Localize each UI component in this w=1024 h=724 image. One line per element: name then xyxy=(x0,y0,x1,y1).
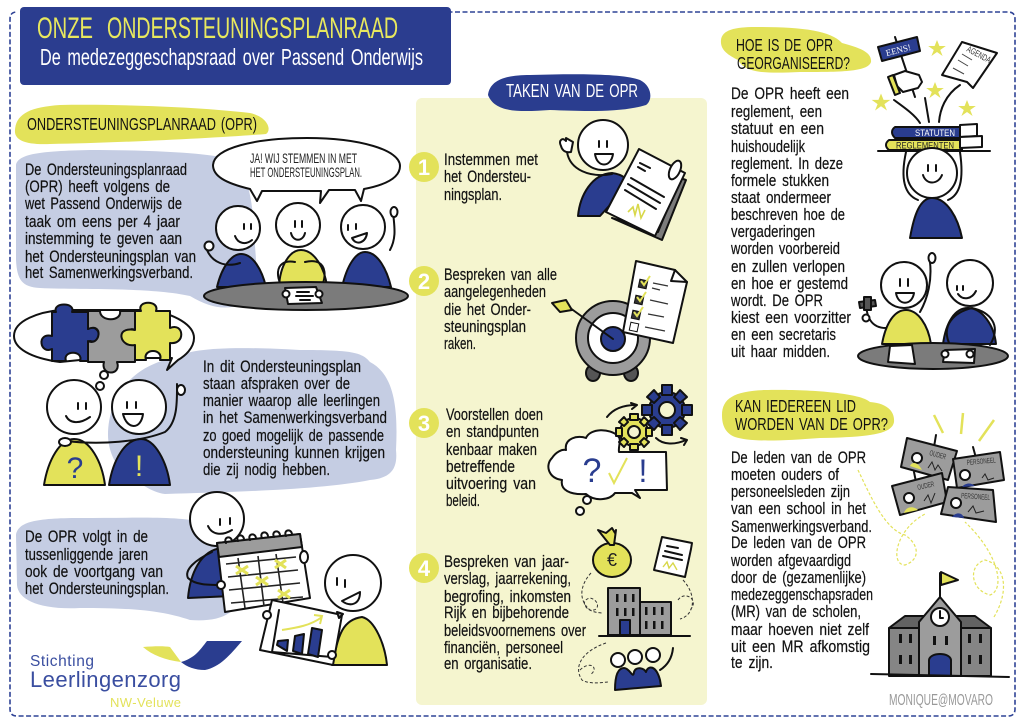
text: lidmaatschap: moeten ouders of xyxy=(731,466,839,484)
thought bubble: puzzle xyxy=(14,303,194,390)
title xyxy=(37,12,398,45)
item 4: 4 xyxy=(418,556,431,581)
item 1: 1 xyxy=(418,155,430,180)
title banner xyxy=(20,7,451,85)
illustration: name badges xyxy=(858,413,1004,617)
text: lidmaatschap: te zijn. xyxy=(731,654,773,672)
subtitle: De medezeggeschapsraad over Passend Onderwijs xyxy=(40,44,423,70)
panel: taken van de OPR xyxy=(409,74,707,705)
illustration: chair and secretary at table xyxy=(858,253,1008,369)
text: lidmaatschap: uit een MR afkomstig xyxy=(731,638,870,656)
heading: kan iedereen lid worden: KAN IEDEREEN LID xyxy=(735,396,856,416)
item 2: steuningsplan xyxy=(444,318,526,336)
item 3: 3 xyxy=(418,411,430,436)
heading: kan iedereen lid worden xyxy=(722,390,894,440)
text: georganiseerd: staat ondermeer xyxy=(731,189,831,207)
item 2: raken. xyxy=(444,335,476,353)
item 3: betreffende xyxy=(446,458,515,476)
text: lidmaatschap: De leden van de OPR xyxy=(731,534,866,552)
logo: Stichting Leerlingenzorg: NW-Veluwe xyxy=(110,695,181,710)
heading: taken: TAKEN VAN DE OPR xyxy=(506,81,638,101)
illustration: money bag, document, building, people xyxy=(579,528,693,690)
item 4: begrofing, inkomsten xyxy=(444,588,571,606)
text: lidmaatschap: worden afgevaardigd xyxy=(730,552,851,570)
illustration: sign, agenda, books and person xyxy=(872,37,997,238)
illustration: person with bar chart xyxy=(260,555,387,665)
illustration: sign, agenda, books and person: STATUTEN xyxy=(915,128,955,139)
text: lidmaatschap: door de (gezamenlijke) xyxy=(731,569,866,587)
logo: Stichting Leerlingenzorg: Leerlingenzorg xyxy=(30,667,181,692)
panel: afspraken text block: in het Samenwerkingsverband xyxy=(203,409,387,427)
illustration: name badges: PERSONEEL xyxy=(961,491,990,502)
text: lidmaatschap: van een school in het xyxy=(731,500,866,518)
text: georganiseerd: beschreven hoe de xyxy=(731,206,845,224)
illustration: name badges: OUDER xyxy=(928,448,948,461)
text: lidmaatschap: medezeggenschapsraden xyxy=(731,586,873,604)
title: ONZE xyxy=(37,12,93,45)
puzzle piece: blue xyxy=(41,304,99,361)
heading: hoe is de OPR georganiseerd xyxy=(721,27,871,73)
item 1: het Ondersteu- xyxy=(444,168,531,186)
item 3: beleid. xyxy=(446,492,480,510)
item 2: Bespreken van alle xyxy=(444,266,557,284)
item 3: Voorstellen doen xyxy=(446,406,543,424)
text: georganiseerd: uit haar midden. xyxy=(731,343,830,361)
panel: intro text block: wet Passend Onderwijs de xyxy=(24,195,182,213)
panel: intro text block xyxy=(16,150,256,308)
text: lidmaatschap: Samenwerkingsverband. xyxy=(731,518,872,536)
text: georganiseerd: reglement. In deze xyxy=(731,155,843,173)
panel: voortgang text block: De OPR volgt in de xyxy=(25,528,148,546)
heading: kan iedereen lid worden: WORDEN VAN DE OPR? xyxy=(735,414,888,434)
title: ONDERSTEUNINGSPLANRAAD xyxy=(107,12,398,45)
item 2: die het Onder- xyxy=(444,301,531,319)
panel: afspraken text block: zo goed mogelijk de passende xyxy=(203,427,384,445)
text: georganiseerd: en hoe er gestemd xyxy=(731,275,848,293)
panel: afspraken text block: In dit Ondersteuningsplan xyxy=(203,358,361,376)
panel: ondersteuningsplanraad heading xyxy=(15,105,269,144)
calendar xyxy=(217,534,310,612)
item 1 xyxy=(409,151,538,204)
illustration: cloud with gears: ? xyxy=(583,452,601,490)
illustration: sign, agenda, books and person: AGENDA xyxy=(965,44,993,65)
text: georganiseerd: huishoudelijk xyxy=(731,138,806,156)
panel: intro text block: De Ondersteuningsplanraad xyxy=(25,161,187,179)
item 3: kenbaar maken xyxy=(446,441,537,459)
item 2: 2 xyxy=(418,269,430,294)
panel: intro text block: instemming te geven aan xyxy=(25,230,182,248)
text: georganiseerd: en een secretaris xyxy=(731,326,836,344)
panel: afspraken text block xyxy=(108,348,397,494)
text: georganiseerd: vergaderingen xyxy=(731,223,815,241)
item 2 xyxy=(409,266,557,353)
item 4: Rijk en bijbehorende xyxy=(444,604,569,622)
text: lidmaatschap xyxy=(730,449,873,672)
illustration: three people at table xyxy=(204,203,408,310)
item 2: aangelegenheden xyxy=(444,283,546,301)
item 3 xyxy=(409,406,543,510)
text: georganiseerd: reglement, een xyxy=(731,103,822,121)
panel: voortgang text block: het Ondersteuningsplan. xyxy=(25,580,169,598)
illustration: name badges: OUDER xyxy=(916,479,935,492)
panel: afspraken text block: ondersteuning kunnen krijgen xyxy=(203,444,385,462)
text: lidmaatschap: personeelsleden zijn xyxy=(731,483,850,501)
illustration: two people with question and exclamation xyxy=(44,380,185,485)
illustration: cloud with gears: ! xyxy=(639,453,647,489)
panel: intro text block: het Ondersteuningsplan van xyxy=(25,248,196,266)
illustration: two people with question and exclamation: ? xyxy=(67,452,83,485)
illustration: sign, agenda, books and person: EENS! xyxy=(885,42,912,58)
illustration: name badges: PERSONEEL xyxy=(966,455,996,467)
illustration: sign, agenda, books and person: REGLEMENTEN xyxy=(896,140,954,150)
panel: afspraken text block: staan afspraken over de xyxy=(203,375,350,393)
item 1: Instemmen met xyxy=(444,151,538,169)
text: georganiseerd: formele stukken xyxy=(731,172,829,190)
speech bubble: JA! WIJ STEMMEN IN MET xyxy=(250,150,357,166)
logo: Stichting Leerlingenzorg: Stichting xyxy=(30,653,94,670)
illustration: person with document xyxy=(560,120,686,240)
panel: afspraken text block: manier waarop alle leerlingen xyxy=(203,392,380,410)
illustration: school xyxy=(871,572,1009,677)
illustration: person with calendar xyxy=(187,492,310,612)
text: georganiseerd: statuut en een xyxy=(731,120,824,138)
gear: yellow xyxy=(616,414,652,450)
illustration: two people with question and exclamation: ! xyxy=(135,450,143,483)
heading: hoe is de OPR georganiseerd: GEORGANISEERD? xyxy=(737,53,850,73)
item 4: beleidsvoornemens over xyxy=(444,622,586,640)
text: georganiseerd: De OPR heeft een xyxy=(731,85,849,103)
item 1: ningsplan. xyxy=(444,186,502,204)
heading: hoe is de OPR georganiseerd: HOE IS DE OPR xyxy=(736,35,833,55)
item 4: financiën, personeel xyxy=(444,639,563,657)
heading: taken xyxy=(488,74,650,111)
panel: intro text block: taak om eens per 4 jaar xyxy=(25,213,180,231)
text: lidmaatschap: De leden van de OPR xyxy=(731,449,866,467)
logo: Stichting Leerlingenzorg xyxy=(30,641,242,710)
panel: afspraken text block: die zij nodig hebben. xyxy=(203,461,330,479)
illustration: target with checklist xyxy=(552,261,687,381)
item 4: Bespreken van jaar- xyxy=(444,553,569,571)
illustration: cloud with gears xyxy=(548,385,692,515)
puzzle piece: yellow xyxy=(121,303,181,360)
panel: voortgang text block: ook de voortgang van xyxy=(25,563,163,581)
panel: intro text block: (OPR) heeft volgens de xyxy=(25,178,170,196)
gear: blue xyxy=(642,385,692,435)
speech bubble xyxy=(213,138,400,203)
text: lidmaatschap: (MR) van de scholen, xyxy=(731,603,861,621)
text: georganiseerd: wordt. De OPR xyxy=(730,292,823,310)
panel: voortgang text block: tussenliggende jaren xyxy=(25,546,148,564)
speech bubble: HET ONDERSTEUNINGSPLAN. xyxy=(250,164,362,180)
text: lidmaatschap: maar hoeven niet zelf xyxy=(731,621,869,639)
puzzle piece: gray xyxy=(88,311,135,372)
item 4: en organisatie. xyxy=(444,655,532,673)
item 3: uitvoering van xyxy=(446,475,536,493)
illustration: money bag, document, building, people: € xyxy=(607,550,617,570)
text: georganiseerd: kiest een voorzitter xyxy=(731,309,851,327)
text: georganiseerd: worden voorbereid xyxy=(730,240,840,258)
item 4: verslag, jaarrekening, xyxy=(444,570,571,588)
text: georganiseerd: en zullen verlopen xyxy=(731,258,845,276)
item 4 xyxy=(409,553,586,673)
panel: intro text block: het Samenwerkingsverband. xyxy=(25,264,193,282)
panel: voortgang text block xyxy=(16,518,244,620)
item 3: en standpunten xyxy=(446,423,539,441)
text: georganiseerd xyxy=(730,85,851,361)
panel: ondersteuningsplanraad heading: ONDERSTEUNINGSPLANRAAD (OPR) xyxy=(27,114,257,134)
